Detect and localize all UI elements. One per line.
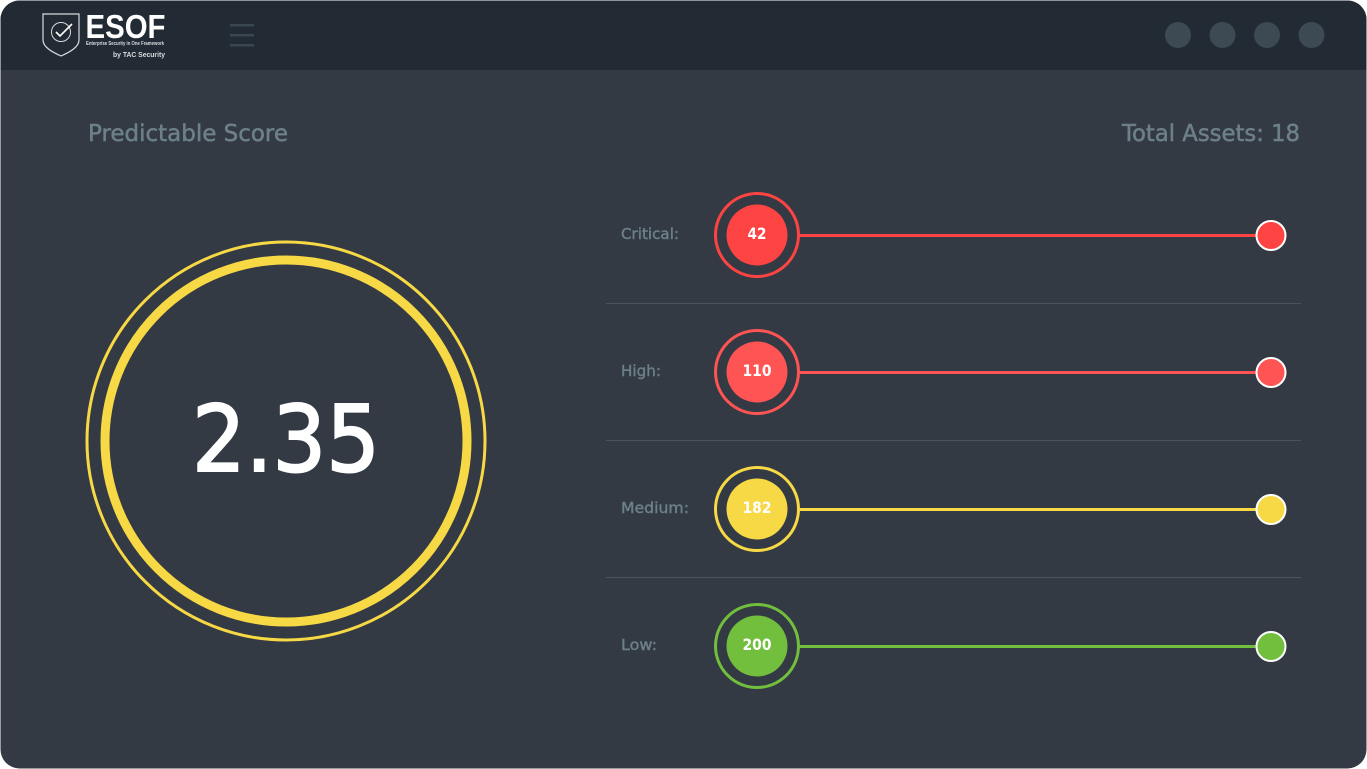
- logo wordmark: ESOF: [86, 9, 166, 46]
- end marker: Critical: [1256, 221, 1286, 250]
- row: High: [621, 330, 1286, 414]
- panel: header bar: [0, 0, 1367, 70]
- row: Medium: [621, 468, 1286, 550]
- label: Critical: Critical:: [621, 225, 679, 243]
- badge: High 110: 110: [742, 361, 772, 380]
- badge: Medium 182: [716, 468, 798, 550]
- line: Medium: [798, 508, 1258, 511]
- line: High: [798, 371, 1258, 374]
- icon: hamburger menu: [230, 24, 254, 46]
- logo tagline: Enterprise Security in One Framework: [86, 41, 165, 47]
- heading: Total Assets: Total Assets: 18: [1121, 121, 1300, 147]
- label: Low: Low:: [621, 636, 657, 654]
- logo byline: by TAC Security: [113, 50, 166, 59]
- label: High: High:: [621, 362, 661, 380]
- line: Low: [798, 645, 1258, 648]
- label: Medium: Medium:: [621, 499, 689, 517]
- score gauge: [87, 242, 485, 640]
- end marker: Medium: [1256, 495, 1286, 524]
- header action dots: [1165, 22, 1324, 48]
- badge: Low 200: [716, 604, 798, 688]
- badge: High 110: [716, 330, 798, 414]
- row: Low: [621, 604, 1286, 688]
- end marker: High: [1256, 358, 1286, 387]
- row: Critical: [621, 194, 1286, 276]
- end marker: Low: [1256, 632, 1286, 661]
- logo: ESOF by TAC Security: [43, 9, 166, 59]
- icon: shield with check: [43, 14, 79, 56]
- badge: Critical 42: 42: [748, 224, 766, 243]
- badge: Low 200: 200: [742, 635, 772, 654]
- heading: Predictable Score: Predictable Score: [88, 121, 288, 147]
- badge: Critical 42: [716, 194, 798, 276]
- badge: Medium 182: 182: [742, 498, 772, 517]
- score value: 2.35: [192, 386, 380, 493]
- line: Critical: [798, 234, 1258, 237]
